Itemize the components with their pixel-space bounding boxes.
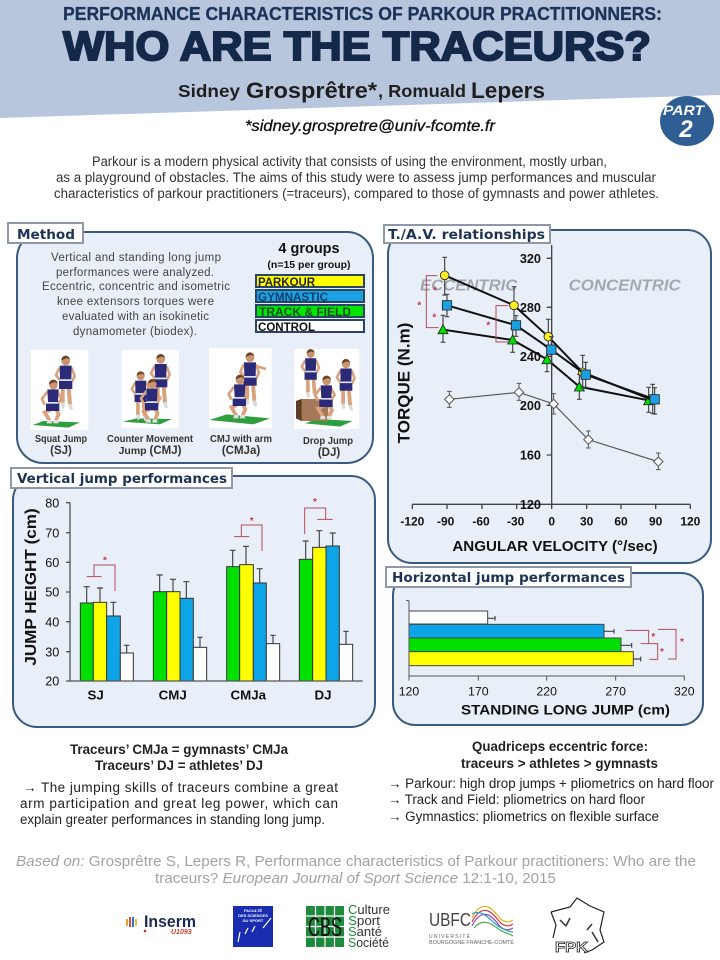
subtitle: PERFORMANCE CHARACTERISTICS OF PARKOUR PRACTITIONNERS: [63,4,662,24]
axis tick labels: 160 [520,449,541,463]
y tick labels: 70 [45,526,59,540]
jump captions: Jump (CMJ) [119,445,182,457]
torque line chart: -120 [400,514,425,528]
authors: , Romuald [378,81,466,101]
groups legend: GYMNASTIC [258,290,328,304]
axis tick labels: 280 [520,301,541,315]
logo: faculte des sciences du sport: FACULTÉ [244,908,262,913]
header banner [0,0,720,118]
logo: culture sport sante societe: Santé [348,924,382,939]
torque line chart: 30 [580,514,594,528]
logo: culture sport sante societe: Sport [348,913,380,928]
control series [445,383,663,470]
reference citation: Based on: Grosprêtre S, Lepers R, Performance characteristics of Parkour practitioners: Who are the [16,853,696,870]
category labels: SJ [88,687,104,702]
logo: inserm: Inserm [144,912,196,931]
torque line chart: * [433,285,437,296]
bars [80,546,353,681]
axis tick labels: 320 [520,252,541,266]
category labels: CMJa [231,687,267,702]
eccentric and concentric labels: ECCENTRIC [420,277,518,294]
groups legend: TRACK & FIELD [259,305,351,319]
method description: performances were analyzed. [56,267,214,279]
x tick labels [399,685,695,699]
torque heading: T./A.V. relationships [388,228,545,243]
authors [178,78,545,103]
logo: faculte des sciences du sport: DU SPORT [243,918,264,923]
y tick labels [45,496,59,689]
eccentric and concentric labels [420,277,681,294]
squat jump figure [31,350,88,430]
introduction text: as a playground of obstacles. The aims of this study were to assess jump performances and muscular [56,170,656,185]
axis tick labels [520,252,541,512]
horizontal jump heading: Horizontal jump performances [392,570,625,586]
authors: Sidney [178,81,240,101]
x axis title: STANDING LONG JUMP (cm) [461,702,670,718]
category labels: CMJ [159,687,187,702]
parkour series [440,257,655,413]
standing long jump bar chart [399,601,695,718]
groups legend [256,241,364,334]
badge: part 2: 2 [678,116,693,143]
x tick labels: 220 [536,685,557,699]
conclusion: eccentric force: traceurs > athletes > gymnasts [461,755,658,771]
torque line chart: 90 [649,514,663,528]
jump illustrations [31,348,359,430]
groups legend: CONTROL [258,320,315,334]
axis tick labels: 120 [520,498,541,512]
standing long jump bar chart: * [660,647,664,658]
y tick labels: 60 [45,556,59,570]
jump captions: Squat Jump [35,433,87,445]
significance brackets [426,276,508,342]
logo: inserm: U1093 [171,929,192,936]
x tick labels: 320 [674,685,695,699]
introduction text: Parkour is a modern physical activity that consists of using the environment, mostly urban, [92,154,607,169]
torque line chart: 60 [614,514,628,528]
panel: method [8,223,373,463]
y tick labels: 30 [45,645,59,659]
torque line chart: * [417,301,421,312]
vertical jump heading: Vertical jump performances [17,471,227,487]
vertical jump bar chart: * [103,555,107,566]
authors: Grosprêtre* [246,78,377,103]
jump captions: Counter Movement [107,433,193,445]
conclusion: vertical jumps: → The jumping skills of traceurs combine a great [23,780,338,795]
method heading: Method [17,227,75,243]
drop jump figure [294,349,359,429]
gymnastics series [442,294,659,414]
torque line chart: * [432,312,436,323]
conclusion: eccentric force: → Track and Field: pliometrics on hard floor [388,792,645,807]
logo: culture sport sante societe: CBS [308,912,342,942]
groups legend: PARKOUR [258,275,315,289]
groups legend: (n=15 per group) [267,259,351,271]
vertical jump bar chart: * [250,516,254,527]
conclusion: eccentric force: → Gymnastics: pliometrics on flexible surface [388,809,659,824]
method description: Vertical and standing long jump [51,252,221,264]
axes [406,601,685,681]
conclusion: eccentric force [388,738,714,824]
logo: fpk [551,898,604,956]
torque line chart: 0 [548,514,555,528]
x tick labels: 270 [605,685,626,699]
method description: knee extensors torques were [57,296,214,308]
jump captions: (CMJa) [222,445,260,457]
torque line chart: -90 [437,514,455,528]
axis tick labels: 200 [520,399,541,413]
reference citation [16,853,696,887]
axes [412,245,690,509]
logo: ubfc: UBFC [429,910,471,930]
jump captions: Drop Jump [303,435,353,447]
authors: Lepers [471,78,545,103]
significance brackets [87,508,333,591]
x tick labels: 120 [399,685,419,699]
axis tick labels: 240 [520,350,541,364]
jump captions [35,433,353,459]
logo: ubfc [429,906,515,946]
introduction text [54,154,659,201]
logo: culture sport sante societe: Société [348,935,389,950]
torque line chart: -60 [472,514,490,528]
y tick labels: 50 [45,586,59,600]
logo: faculte des sciences du sport: DES SCIENCES [238,913,268,918]
axis titles: ANGULAR VELOCITY (°/sec) [452,539,658,555]
eccentric and concentric labels: CONCENTRIC [569,277,681,294]
conclusion: eccentric force: Quadriceps eccentric force: [472,738,648,754]
category labels: DJ [314,687,332,702]
error bars [488,616,641,661]
jump captions: (SJ) [50,445,72,457]
torque line chart: -30 [507,514,525,528]
logo: culture sport sante societe: Culture [348,902,390,917]
panel: torque velocity relationships [384,225,711,563]
torque line chart: * [486,321,490,332]
title: WHO ARE THE TRACEURS? [63,23,651,69]
badge: part 2: PART [663,103,706,118]
significance brackets [625,629,676,659]
logo: fpk: FPK [555,939,588,956]
badge: part 2 [660,96,714,146]
standing long jump bar chart: * [680,637,684,648]
jump captions: (DJ) [318,447,340,459]
logo: faculte des sciences du sport [233,906,273,947]
counter movement jump figure [122,350,179,428]
y tick labels: 40 [45,615,59,629]
vertical jump bar chart [23,496,363,702]
introduction text: characteristics of parkour practitioners (=traceurs), compared to those of gymnasts and power athletes. [54,186,659,201]
error bars [84,531,349,653]
jump captions: CMJ with arm [210,433,272,445]
logo: inserm [126,912,196,936]
track and field series [438,315,654,412]
y axis title: JUMP HEIGHT (cm) [23,508,40,666]
axes [66,503,363,681]
torque line chart: 120 [680,514,701,528]
conclusion: vertical jumps: explain greater performances in standing long jump. [20,812,325,827]
method heading [8,223,83,243]
conclusion: vertical jumps: Traceurs’ DJ = athletes’ DJ [95,757,263,773]
reference citation: traceurs? European Journal of Sport Science 12:1-10, 2015 [155,870,556,887]
conclusion: vertical jumps: arm participation and great leg power, which can [20,796,338,811]
torque line chart [394,245,701,555]
panel: vertical jump performances [11,468,375,727]
groups legend: 4 groups [278,241,340,257]
conclusion: vertical jumps [20,741,338,827]
cmj with arm figure [209,348,272,428]
method description [42,252,230,338]
email: *sidney.grospretre@univ-fcomte.fr [245,118,496,135]
vertical jump bar chart: * [313,497,317,508]
y tick labels: 20 [45,675,59,689]
x tick labels: 170 [468,685,489,699]
method description: Eccentric, concentric and isometric [42,281,230,293]
category labels [88,687,332,702]
standing long jump bar chart: * [651,632,655,643]
y tick labels: 80 [45,496,59,510]
logo: ubfc: UNIVERSITÉ [429,933,471,940]
method description: evaluated with an isokinetic [62,311,209,323]
bars [409,611,633,666]
panel: horizontal jump performances [386,567,703,725]
logo: ubfc: BOURGOGNE FRANCHE-COMTÉ [429,939,515,946]
conclusion: vertical jumps: Traceurs’ CMJa = gymnasts’ CMJa [70,741,288,757]
logo: culture sport sante societe [306,902,390,950]
method description: dynamometer (biodex). [73,326,197,338]
conclusion: eccentric force: → Parkour: high drop jumps + pliometrics on hard floor [388,776,714,791]
torque line chart: TORQUE (N.m) [394,323,413,443]
